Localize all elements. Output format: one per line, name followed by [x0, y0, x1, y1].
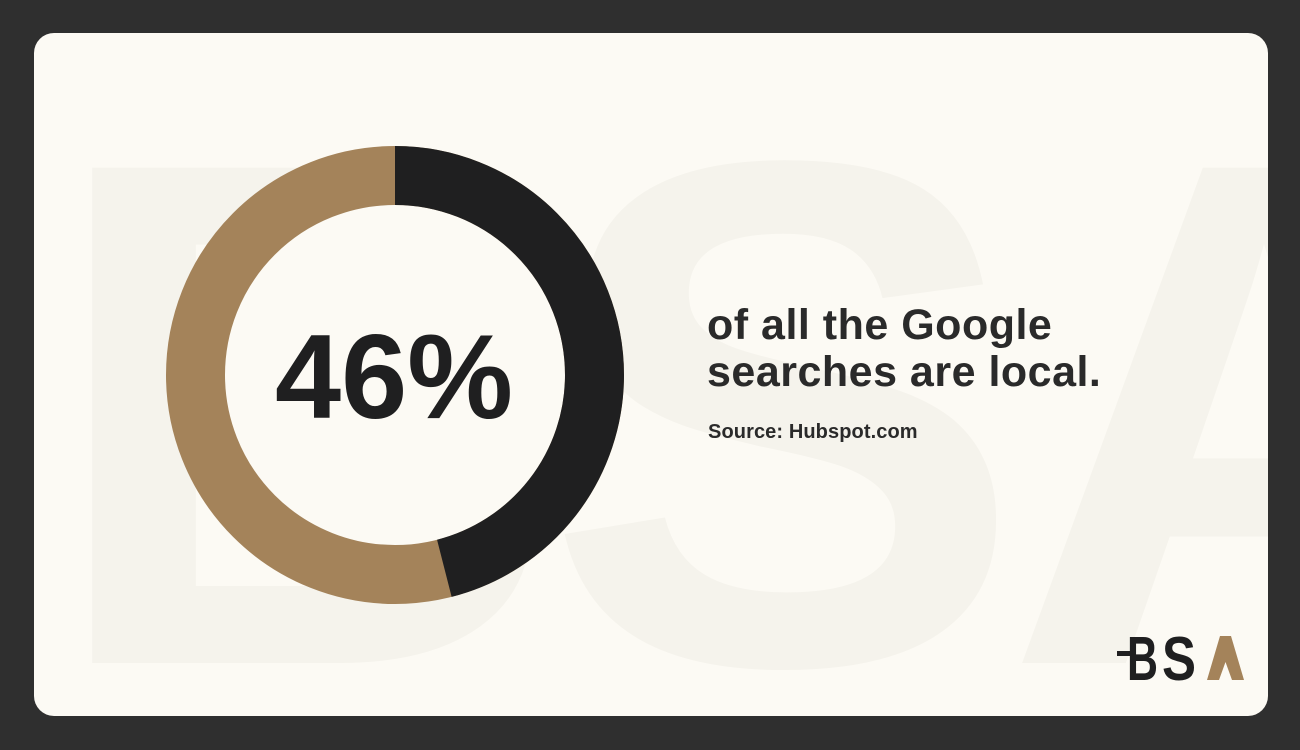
statement text: searches are local.: [707, 348, 1101, 396]
big stat: 46%: [275, 310, 513, 444]
statement text: [707, 301, 1101, 396]
logo: [1117, 628, 1244, 688]
statement text: of all the Google: [707, 301, 1052, 349]
source: Source: Hubspot.com: [708, 421, 918, 443]
